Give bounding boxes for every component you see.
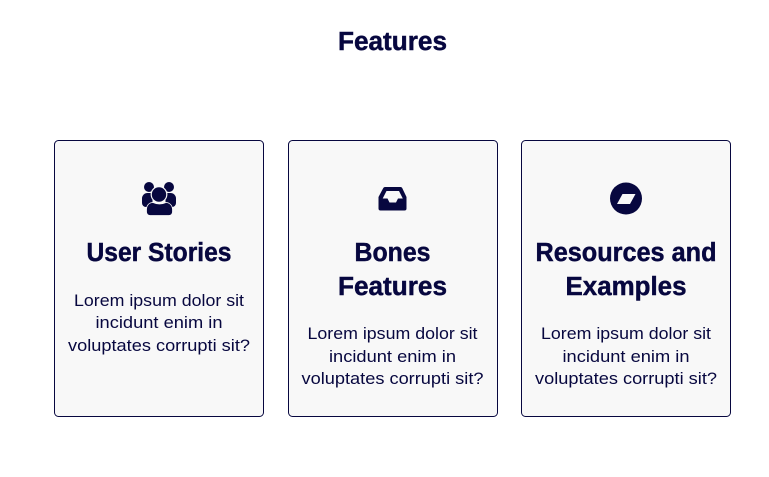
text block: Resources and Examples description: incidunt enim in bbox=[562, 348, 690, 366]
text block: Resources and Examples description: Lorem ipsum dolor sit bbox=[541, 325, 711, 343]
heading: Bones Features: Features bbox=[338, 273, 447, 301]
icon: inbox tray bbox=[378, 187, 406, 210]
panel: Resources and Examples bbox=[522, 140, 730, 416]
heading: Resources and Examples: Examples bbox=[566, 273, 686, 301]
text block: User Stories description: voluptates corrupti sit? bbox=[68, 337, 250, 355]
heading: Resources and Examples: Resources and bbox=[536, 239, 716, 267]
text block: User Stories description: incidunt enim in bbox=[96, 314, 222, 332]
icon: users bbox=[142, 182, 176, 216]
text block: Resources and Examples description bbox=[535, 325, 717, 388]
text block: Bones Features description: incidunt enim in bbox=[329, 348, 456, 366]
text block: User Stories description bbox=[68, 292, 250, 355]
heading: Resources and Examples bbox=[536, 239, 716, 301]
text block: Bones Features description: Lorem ipsum dolor sit bbox=[308, 325, 478, 343]
icon: parallelogram in circle bbox=[610, 182, 642, 214]
text block: Resources and Examples description: voluptates corrupti sit? bbox=[535, 370, 717, 388]
heading: Bones Features: Bones bbox=[354, 239, 430, 267]
panel: Bones Features bbox=[288, 140, 498, 416]
text block: Bones Features description bbox=[302, 325, 484, 388]
heading: User Stories: User Stories bbox=[86, 239, 232, 267]
text block: Bones Features description: voluptates corrupti sit? bbox=[302, 370, 484, 388]
title: Features bbox=[338, 28, 447, 56]
heading: Bones Features bbox=[338, 239, 447, 301]
text block: User Stories description: Lorem ipsum dolor sit bbox=[74, 292, 244, 310]
panel: User Stories bbox=[54, 140, 264, 416]
